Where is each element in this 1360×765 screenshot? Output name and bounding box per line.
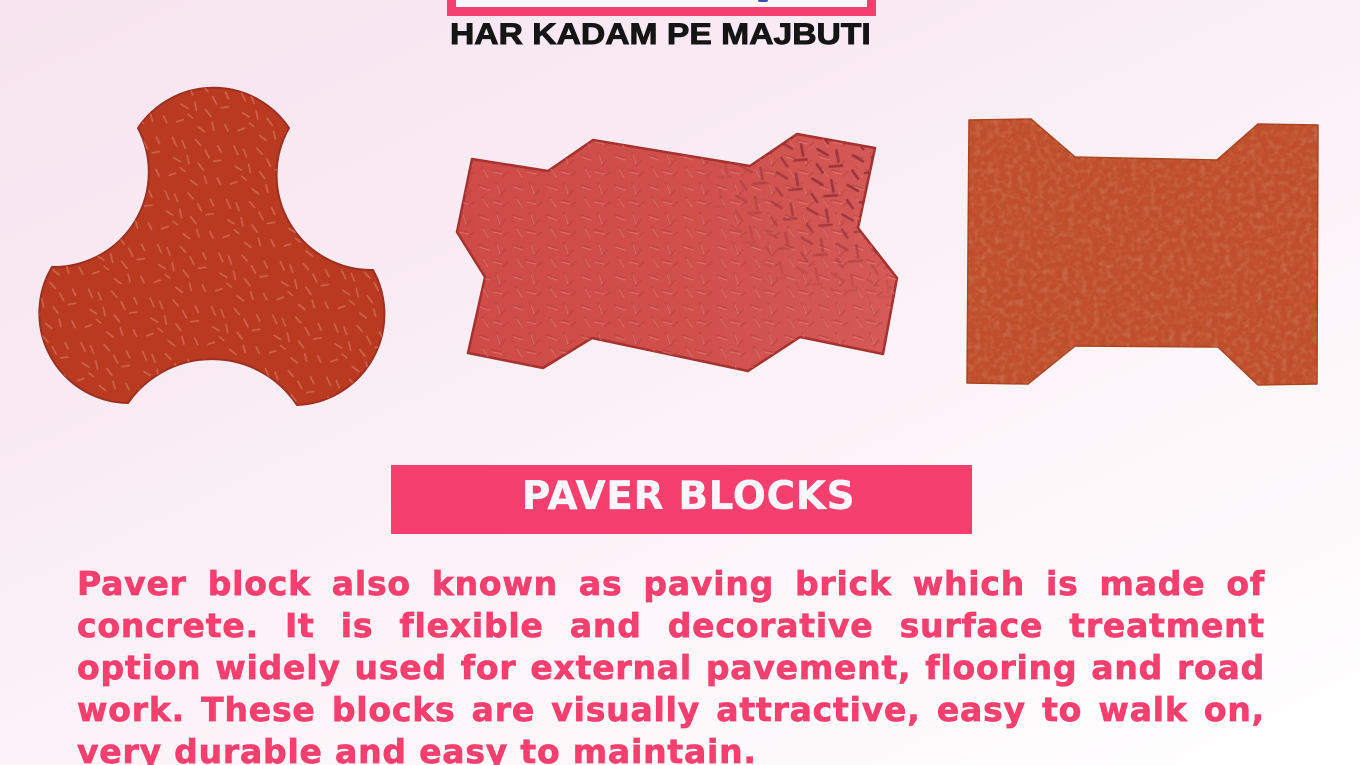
block: zigzag paver — [450, 125, 910, 375]
heading: PAVER BLOCKS — [522, 474, 855, 519]
block: trihex paver — [30, 80, 400, 410]
paver block images — [38, 86, 1319, 406]
tagline: HAR KADAM PE MAJBUTI — [450, 18, 871, 51]
description paragraph — [77, 564, 1265, 765]
block: dumbbell paver — [966, 118, 1319, 386]
description paragraph: work. These blocks are visually attractive, easy to walk on, — [77, 690, 1265, 729]
description paragraph: option widely used for external pavement, flooring and road — [77, 648, 1265, 687]
description paragraph: concrete. It is flexible and decorative surface treatment — [77, 606, 1265, 645]
logo frame — [447, 0, 876, 16]
logo blue mark — [758, 0, 768, 2]
heading bar — [391, 465, 972, 534]
description paragraph: Paver block also known as paving brick which is made of — [77, 564, 1265, 603]
